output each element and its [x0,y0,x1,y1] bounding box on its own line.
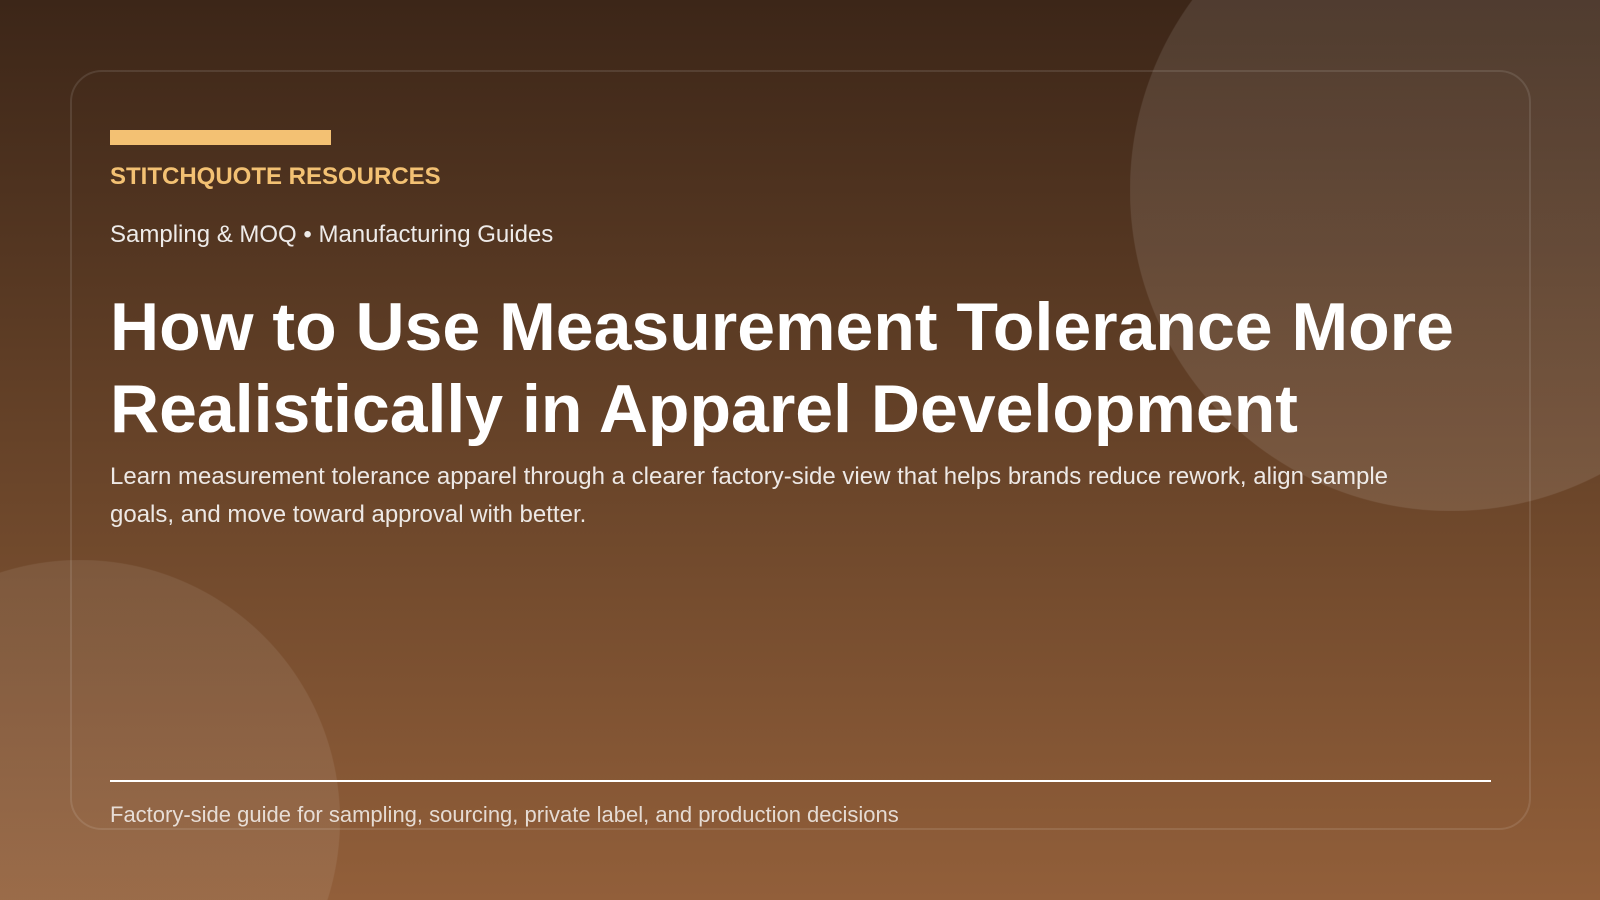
accent bar [110,130,331,145]
description: goals, and move toward approval with better. [110,501,586,528]
eyebrow: brand label: STITCHQUOTE RESOURCES [110,163,441,190]
title: How to Use Measurement Tolerance More [110,289,1454,365]
footer rule [110,780,1491,782]
decorative circle: bottom left [0,560,341,900]
title [110,289,1454,447]
description: Learn measurement tolerance apparel through a clearer factory-side view that helps brands reduce rework, align sample [110,463,1388,490]
title: Realistically in Apparel Development [110,371,1298,447]
panel: card outline [70,70,1531,830]
description [110,463,1388,528]
decorative circle: top right [1130,0,1600,511]
category line: Sampling & MOQ • Manufacturing Guides [110,221,553,248]
footer text: Factory-side guide for sampling, sourcing, private label, and production decisions [110,802,899,827]
